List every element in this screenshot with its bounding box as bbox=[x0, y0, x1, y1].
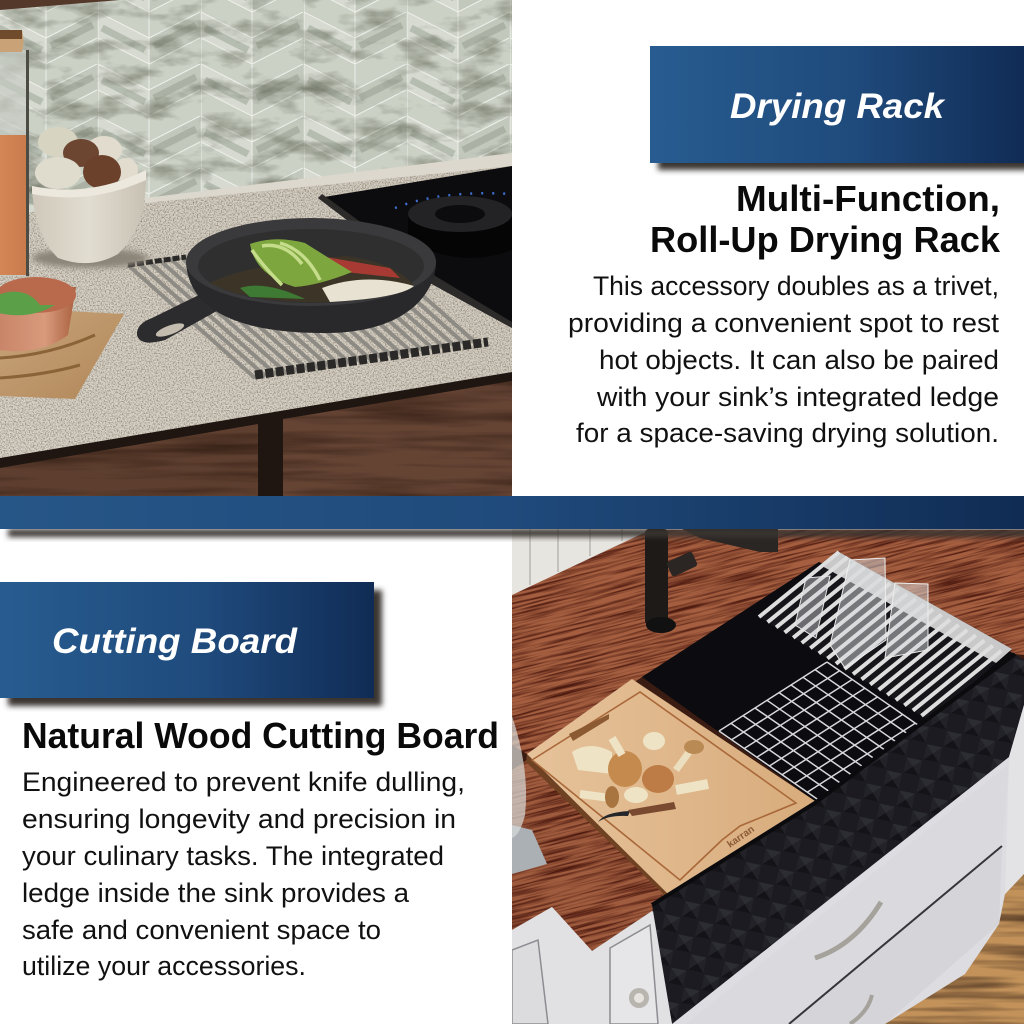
upper cabinet edge bbox=[0, 0, 120, 10]
textured sink apron bbox=[652, 654, 1024, 1024]
drawer fronts with handles bbox=[788, 845, 1003, 1024]
blue divider band bbox=[0, 496, 1024, 537]
left cabinet with knob bbox=[512, 907, 672, 1024]
photo: farmhouse sink with cutting board bbox=[512, 529, 1024, 1024]
stainless steel rack bbox=[759, 552, 1012, 721]
cast iron skillet with food bbox=[137, 218, 436, 343]
brand mark: karran bbox=[725, 824, 757, 850]
bowl of eggs bbox=[32, 127, 148, 268]
description: for a space-saving drying solution. bbox=[576, 418, 999, 448]
banner: Drying Rack bbox=[650, 46, 1024, 170]
cutting board with mushrooms bbox=[526, 679, 815, 908]
description bbox=[568, 271, 1000, 448]
knife bbox=[598, 802, 676, 822]
glass jar with orange drink bbox=[0, 30, 29, 276]
hardwood floor bbox=[885, 874, 1024, 1024]
description: ledge inside the sink provides a bbox=[22, 878, 410, 908]
description: providing a convenient spot to rest bbox=[568, 308, 1000, 338]
black faucet bbox=[645, 529, 778, 633]
banner: Cutting Board: Cutting Board bbox=[52, 622, 298, 661]
description: ensuring longevity and precision in bbox=[22, 804, 456, 834]
tiled chevron backsplash bbox=[0, 0, 512, 212]
lower wood countertop bbox=[512, 760, 664, 951]
description: This accessory doubles as a trivet, bbox=[593, 271, 999, 301]
upper wood countertop bbox=[512, 530, 1024, 754]
banner: Cutting Board bbox=[0, 582, 382, 706]
induction cooktop bbox=[318, 166, 512, 328]
description bbox=[22, 767, 465, 981]
description: utilize your accessories. bbox=[22, 951, 306, 981]
description: Engineered to prevent knife dulling, bbox=[22, 767, 465, 797]
mushrooms bbox=[572, 732, 708, 808]
text panel: drying rack bbox=[568, 46, 1024, 448]
glass and napkin at left edge bbox=[512, 716, 547, 874]
wooden cabinet doors bbox=[0, 372, 512, 496]
copper bowl of greens bbox=[0, 277, 76, 351]
rack bars and end caps bbox=[127, 254, 489, 380]
description: with your sink’s integrated ledge bbox=[596, 382, 999, 412]
photo: skillet on roll-up drying rack bbox=[0, 0, 512, 496]
right cabinet side bbox=[1005, 705, 1024, 894]
heading: Natural Wood Cutting Board bbox=[22, 715, 499, 756]
olive wood board bbox=[0, 309, 124, 399]
heading: Multi-Function, bbox=[736, 178, 1000, 219]
dark counter cut-out beneath the board bbox=[512, 556, 1024, 905]
white panelled wall bbox=[512, 529, 626, 594]
banner: Drying Rack: Drying Rack bbox=[730, 87, 946, 126]
drinking glasses bbox=[795, 558, 928, 668]
text panel: cutting board bbox=[0, 582, 499, 981]
description: hot objects. It can also be paired bbox=[599, 345, 999, 375]
sink interior bbox=[642, 562, 1015, 801]
description: safe and convenient space to bbox=[22, 915, 381, 945]
description: your culinary tasks. The integrated bbox=[22, 841, 444, 871]
heading: Roll-Up Drying Rack bbox=[650, 219, 1001, 260]
cabinet base bbox=[512, 529, 1024, 1024]
speckled stone countertop bbox=[0, 153, 512, 460]
heading bbox=[650, 178, 1001, 260]
wire sink grid bbox=[719, 662, 928, 801]
